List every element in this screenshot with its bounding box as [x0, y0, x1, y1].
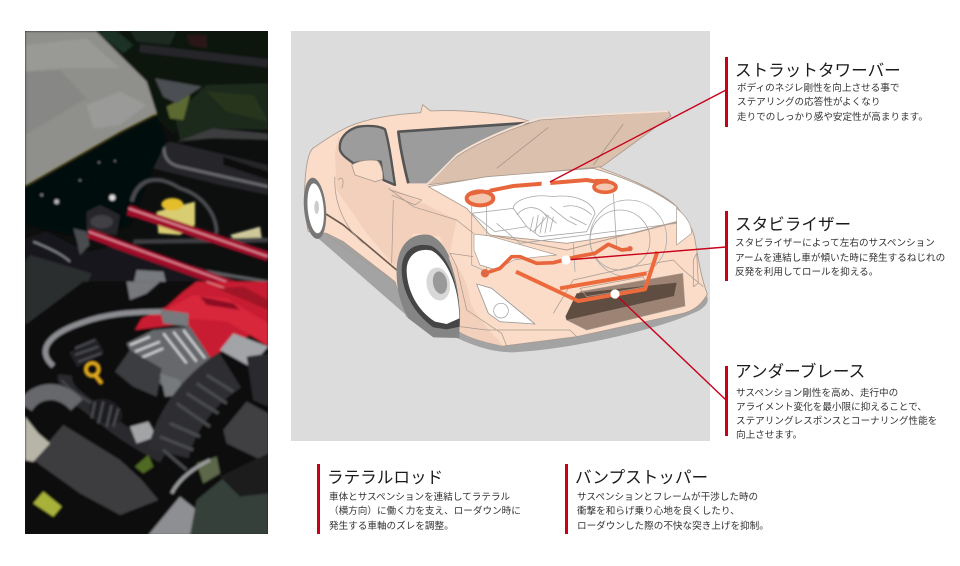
fog lamp — [477, 284, 535, 324]
door mirror — [352, 160, 383, 182]
marker: stabilizer — [561, 255, 571, 265]
description: bump stopper: サスペンションとフレームが干渉した時の — [577, 492, 758, 502]
description: stabilizer: 反発を利用してロールを抑える。 — [735, 267, 878, 278]
photo: engine bay with strut tower bar — [25, 31, 268, 534]
text block: strut tower bar — [725, 57, 928, 127]
car shadow — [307, 210, 708, 352]
description: stabilizer: スタビライザーによって左右のサスペンション — [735, 238, 935, 249]
front tyre — [402, 245, 460, 329]
description: strut tower bar: ボディのネジレ剛性を向上させる事で — [737, 82, 899, 94]
hood front edge — [427, 111, 668, 185]
marker: strut tower bar — [541, 179, 551, 189]
front wheel arch — [397, 235, 461, 338]
part: strut tower bar — [467, 180, 616, 205]
description: under brace: アライメント変化を最小限に抑えることで、 — [736, 402, 927, 413]
description: strut tower bar — [737, 82, 928, 122]
text block: lateral rod — [317, 464, 521, 534]
part: stabilizer — [482, 244, 632, 277]
engine bay — [428, 168, 678, 243]
front wheel — [407, 250, 459, 324]
leader line: strut tower bar — [546, 90, 726, 184]
car body — [305, 105, 707, 346]
wheel hub — [424, 266, 453, 302]
heading: stabilizer: スタビライザー — [735, 214, 851, 234]
panel: car diagram — [291, 31, 710, 441]
description: under brace — [736, 388, 937, 441]
rear wheel — [301, 177, 329, 240]
description: strut tower bar: 走りでのしっかり感や安定性が高まります。 — [737, 112, 928, 122]
part: under brace — [516, 252, 657, 301]
description: stabilizer: アームを連結し車が傾いた時に発生するねじれの — [735, 252, 945, 264]
heading: bump stopper: バンプストッパー — [575, 468, 708, 487]
marker: under brace — [610, 289, 620, 299]
description: stabilizer — [735, 238, 945, 278]
heading: under brace: アンダーブレース — [735, 362, 865, 381]
hood edge crease — [490, 222, 677, 250]
description: under brace: ステアリングレスポンスとコーナリング性能を — [736, 416, 937, 427]
side window — [340, 126, 395, 185]
description: bump stopper — [577, 492, 769, 532]
description: lateral rod — [329, 492, 521, 532]
body side shading — [335, 137, 457, 267]
description: bump stopper: ローダウンした際の不快な突き上げを抑制。 — [577, 520, 769, 532]
heading: lateral rod: ラテラルロッド — [327, 468, 443, 487]
body panel lines — [327, 177, 703, 346]
side sill — [326, 214, 397, 270]
description: under brace: 向上させます。 — [736, 430, 802, 441]
fender in front of wheel — [448, 257, 503, 346]
description: lateral rod: （横方向）に働く力を支え、ローダウン時に — [329, 506, 521, 517]
text block: under brace — [725, 362, 937, 441]
description: under brace: サスペンション剛性を高め、走行中の — [736, 388, 898, 399]
windshield — [398, 123, 530, 183]
front grille — [566, 273, 685, 330]
text block: stabilizer — [725, 211, 945, 281]
text block: bump stopper — [565, 464, 769, 534]
headlight — [474, 234, 557, 270]
description: bump stopper: 衝撃を和らげ乗り心地を良くしたり、 — [577, 506, 740, 517]
description: strut tower bar: ステアリングの応答性がよくなり — [737, 97, 880, 108]
engine bay outlines — [472, 193, 677, 277]
leader line: under brace — [615, 294, 726, 400]
description: lateral rod: 発生する車軸のズレを調整。 — [329, 520, 454, 532]
leader line: stabilizer — [566, 247, 726, 260]
opened hood — [427, 111, 671, 185]
heading: strut tower bar: ストラットタワーバー — [735, 61, 901, 80]
description: lateral rod: 車体とサスペンションを連結してラテラル — [329, 492, 510, 502]
